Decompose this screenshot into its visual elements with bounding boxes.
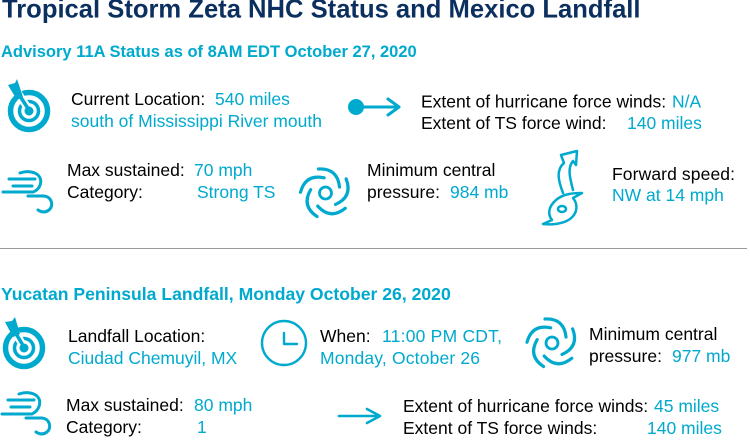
landfall location — [68, 326, 238, 368]
extent of winds advisory: 140 miles — [627, 113, 702, 133]
minimum pressure landfall: 977 mb — [672, 346, 730, 366]
max sustained advisory: Strong TS — [197, 182, 275, 202]
minimum pressure advisory: pressure: — [367, 182, 440, 202]
max sustained landfall: Max sustained: — [66, 395, 184, 415]
minimum pressure advisory: Minimum central — [367, 160, 495, 180]
forward speed: NW at 14 mph — [612, 185, 724, 205]
icon: target — [5, 317, 42, 366]
max sustained landfall: 1 — [197, 417, 207, 437]
minimum pressure landfall — [589, 324, 730, 366]
max sustained advisory: 70 mph — [194, 160, 252, 180]
when — [320, 326, 502, 368]
max sustained advisory — [67, 160, 275, 202]
current location: 540 miles — [215, 89, 290, 109]
max sustained landfall — [66, 395, 252, 437]
extent of winds advisory — [421, 92, 702, 133]
max sustained advisory: Max sustained: — [67, 160, 185, 180]
minimum pressure advisory — [367, 160, 508, 202]
when: Monday, October 26 — [320, 348, 480, 368]
extent of winds landfall: Extent of TS force winds: — [403, 418, 597, 438]
landfall location: Ciudad Chemuyil, MX — [68, 348, 238, 368]
icon: wind — [3, 172, 52, 212]
icon: arrow — [339, 409, 380, 423]
icon: wind — [2, 393, 50, 434]
extent of winds landfall: 140 miles — [647, 418, 722, 438]
forward speed — [612, 164, 735, 205]
extent of winds landfall: 45 miles — [654, 396, 719, 416]
extent of winds advisory: Extent of hurricane force winds: — [421, 92, 666, 112]
heading: yucatan landfall: Yucatan Peninsula Landfall, Monday October 26, 2020 — [1, 284, 451, 304]
extent of winds advisory: Extent of TS force wind: — [421, 113, 606, 133]
icon: target — [8, 79, 48, 130]
minimum pressure landfall: pressure: — [589, 346, 662, 366]
forward speed: Forward speed: — [612, 164, 735, 184]
minimum pressure landfall: Minimum central — [589, 324, 717, 344]
current location — [71, 89, 322, 131]
icon: clock — [262, 321, 306, 365]
minimum pressure advisory: 984 mb — [450, 182, 508, 202]
extent of winds advisory: N/A — [672, 92, 702, 112]
heading: advisory status: Advisory 11A Status as of 8AM EDT October 27, 2020 — [1, 43, 417, 61]
max sustained landfall: Category: — [66, 417, 142, 437]
icon: dot arrow — [348, 99, 399, 115]
when: When: — [320, 326, 371, 346]
landfall location: Landfall Location: — [68, 326, 205, 346]
extent of winds landfall: Extent of hurricane force winds: — [403, 396, 648, 416]
max sustained landfall: 80 mph — [194, 395, 252, 415]
when: 11:00 PM CDT, — [382, 326, 502, 346]
divider — [0, 248, 747, 249]
current location: Current Location: — [71, 89, 205, 109]
current location: south of Mississippi River mouth — [71, 111, 322, 131]
max sustained advisory: Category: — [67, 182, 143, 202]
icon: cyclone — [300, 169, 353, 221]
extent of winds landfall — [403, 396, 722, 438]
icon: cyclone — [527, 319, 579, 371]
icon: storm track — [543, 151, 582, 224]
